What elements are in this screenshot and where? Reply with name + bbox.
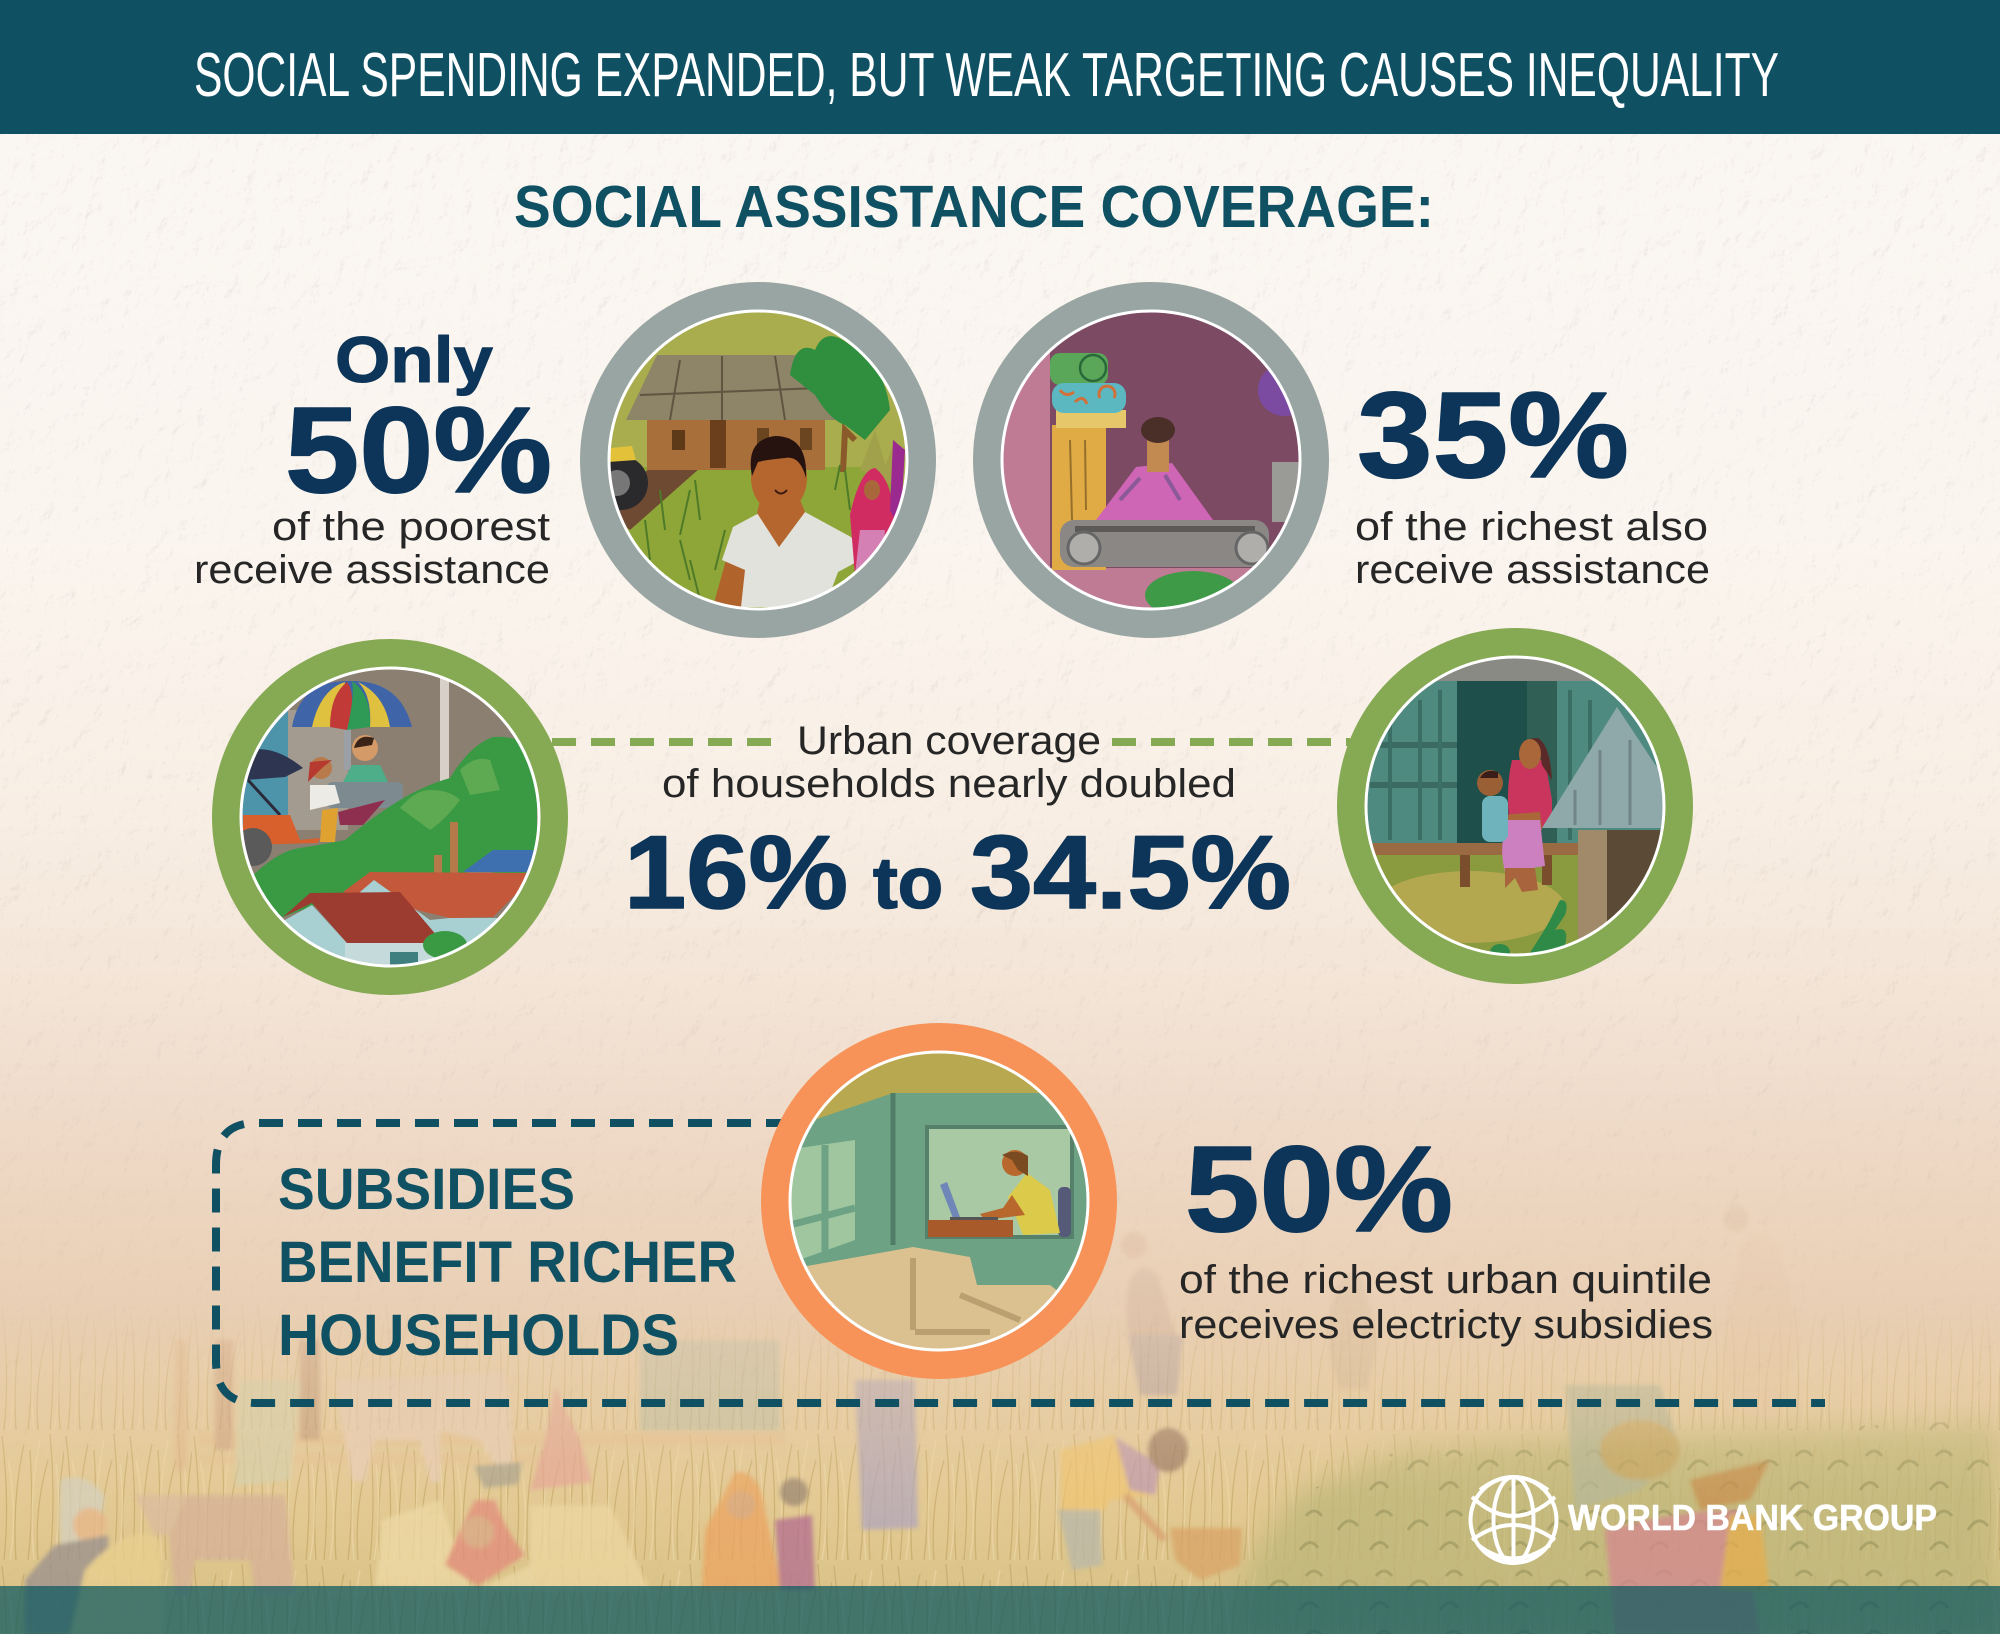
bottom teal band xyxy=(0,1586,2000,1634)
background xyxy=(0,844,2000,1634)
cow left xyxy=(135,1495,295,1596)
icon: globe xyxy=(1470,1477,1556,1563)
urban coverage figures: 16% xyxy=(624,815,848,931)
section heading: SOCIAL ASSISTANCE COVERAGE: xyxy=(514,174,1434,240)
subsidies dashed callout frame xyxy=(216,1123,1825,1403)
stat: subsidies 50%: 50% xyxy=(1185,1121,1453,1257)
header banner xyxy=(0,0,2000,134)
logo: World Bank Group: WORLD BANK GROUP xyxy=(1568,1497,1937,1538)
urban coverage text: Urban coverage xyxy=(797,719,1101,763)
stat: richest 35%: of the richest also xyxy=(1355,505,1708,549)
stat: subsidies 50%: of the richest urban quintile xyxy=(1179,1258,1712,1302)
stat: poorest 50% xyxy=(194,323,552,592)
urban coverage figures xyxy=(624,815,1291,931)
orange-scarf woman and child xyxy=(702,1472,815,1590)
urban coverage text: of households nearly doubled xyxy=(662,762,1236,806)
stat: subsidies 50% xyxy=(1179,1121,1713,1347)
illustration: wealthy shopkeeper xyxy=(973,282,1329,638)
pink seated woman xyxy=(530,1386,592,1490)
stat: richest 35% xyxy=(1355,367,1710,592)
stat: richest 35%: 35% xyxy=(1357,367,1629,503)
logo: World Bank Group xyxy=(1470,1477,1937,1563)
stat: subsidies 50%: receives electricty subsidies xyxy=(1179,1303,1713,1347)
illustration: poor farmer in front of hut xyxy=(580,282,936,638)
urban coverage text xyxy=(624,719,1291,931)
subsidies heading: HOUSEHOLDS xyxy=(278,1303,679,1368)
woman with white scarf xyxy=(25,1477,165,1634)
stat: poorest 50%: of the poorest xyxy=(272,505,550,549)
green-robed person xyxy=(235,1380,300,1486)
paper texture xyxy=(0,134,2000,1194)
subsidies heading xyxy=(278,1157,737,1368)
gatherer with baskets xyxy=(1565,1385,1770,1634)
stat: poorest 50%: Only xyxy=(335,323,493,396)
stat: poorest 50%: 50% xyxy=(285,382,552,518)
urban coverage figures: 34.5% xyxy=(970,815,1291,931)
subsidies heading: SUBSIDIES xyxy=(278,1157,575,1222)
purple dress woman xyxy=(855,1380,918,1530)
wheat sheaves and pink-scarf woman xyxy=(375,1500,650,1590)
illustration: mother and child at house xyxy=(1337,628,1693,984)
stat: richest 35%: receive assistance xyxy=(1355,548,1710,592)
bending woman xyxy=(1058,1428,1242,1580)
connector: urban dashes xyxy=(552,738,1350,746)
subsidies heading: BENEFIT RICHER xyxy=(278,1230,737,1295)
urban coverage figures: to xyxy=(873,844,943,924)
background scene: farm workers, cows and hut xyxy=(25,1205,1800,1634)
illustration: man at laptop in green house xyxy=(761,1023,1117,1379)
stat: poorest 50%: receive assistance xyxy=(194,548,550,592)
white cow xyxy=(335,1372,513,1482)
illustration: urban street scene xyxy=(212,639,568,995)
bucket xyxy=(474,1462,522,1488)
